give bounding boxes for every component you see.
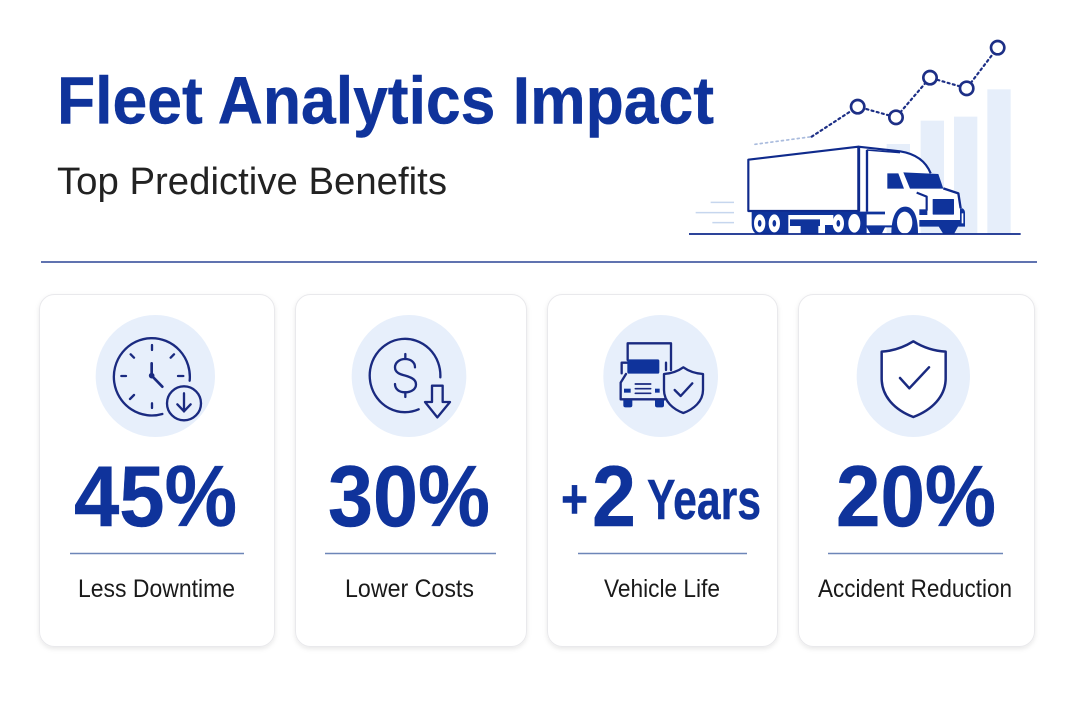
rule [828, 552, 1003, 554]
rule [578, 552, 747, 554]
chassis and rear mass [752, 212, 885, 234]
dotted trend line [755, 41, 1004, 144]
card background [798, 294, 1034, 646]
panel: vehicle life [548, 294, 778, 646]
front wheel arch [891, 207, 918, 234]
panel: less downtime [40, 294, 274, 646]
rule [325, 552, 496, 554]
icon: clock with down arrow [96, 315, 215, 437]
cab outlines [858, 147, 931, 173]
icon: dollar with down arrow [352, 315, 466, 437]
bumper and front tip [919, 208, 965, 227]
icon: truck with shield [603, 315, 718, 437]
icon: shield with check [857, 315, 970, 437]
illustration: truck with rising chart [689, 41, 1021, 234]
grille [933, 199, 954, 215]
label: Accident Reduction [818, 575, 1012, 603]
value: 45% [74, 449, 237, 545]
title: Fleet Analytics Impact [57, 64, 714, 138]
value [561, 449, 761, 545]
label: Lower Costs [345, 575, 474, 603]
trailer box [748, 147, 858, 211]
speed lines [696, 202, 734, 223]
plus sign: + [561, 467, 588, 530]
value: 30% [328, 449, 490, 545]
card background [548, 294, 778, 646]
cab windows [903, 172, 943, 189]
truck [748, 147, 965, 234]
header divider [41, 261, 1037, 263]
rule [70, 552, 244, 554]
hood line [917, 193, 927, 211]
panel: lower costs [296, 294, 526, 646]
years: Years [647, 468, 761, 532]
label: Vehicle Life [604, 575, 720, 603]
panel: accident reduction [798, 294, 1034, 646]
subtitle: Top Predictive Benefits [57, 161, 447, 203]
card background [40, 294, 274, 646]
cab body [858, 147, 965, 227]
ground line [689, 231, 1021, 236]
wheels [754, 212, 912, 234]
background bars [887, 89, 1011, 233]
card background [296, 294, 526, 646]
label: Less Downtime [78, 575, 235, 603]
big two: 2 [592, 449, 636, 545]
value: 20% [836, 449, 996, 545]
